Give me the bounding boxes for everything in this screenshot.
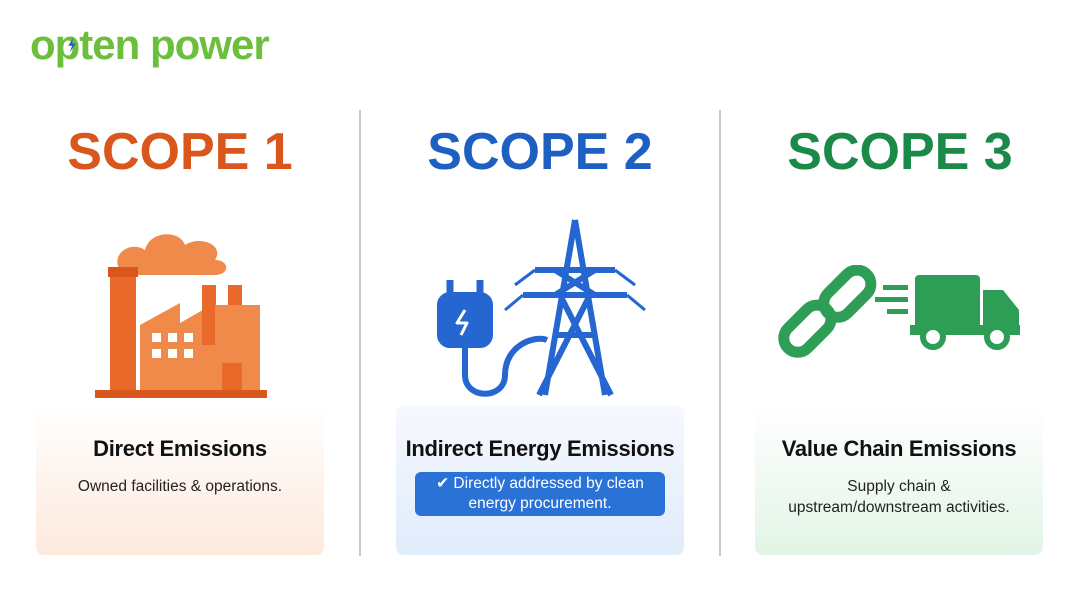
panel: value chain emissions: Value Chain Emissions xyxy=(782,436,1016,461)
heading: scope 1: SCOPE 1 xyxy=(67,123,293,181)
panel: value chain emissions: Supply chain & xyxy=(847,478,951,495)
panel: direct emissions: Owned facilities & operations. xyxy=(78,478,282,495)
heading: scope 3: SCOPE 3 xyxy=(787,123,1013,181)
panel: indirect energy emissions xyxy=(396,405,684,555)
callout: clean energy: ✔ Directly addressed by clean energy procurement. xyxy=(436,475,644,512)
logo: opten power xyxy=(30,21,269,68)
icon: factory xyxy=(95,234,267,398)
panel: value chain emissions: upstream/downstream activities. xyxy=(788,499,1010,516)
heading: scope 2: SCOPE 2 xyxy=(427,123,653,181)
panel: value chain emissions xyxy=(755,405,1043,555)
icon: logo bolt xyxy=(68,38,76,52)
panel: direct emissions xyxy=(36,405,324,555)
panel: indirect energy emissions: Indirect Energy Emissions xyxy=(406,436,674,461)
icon: plug and tower xyxy=(437,220,646,397)
callout: clean energy xyxy=(415,472,665,516)
icon: chain and truck xyxy=(778,265,1020,358)
panel: direct emissions: Direct Emissions xyxy=(93,436,267,461)
